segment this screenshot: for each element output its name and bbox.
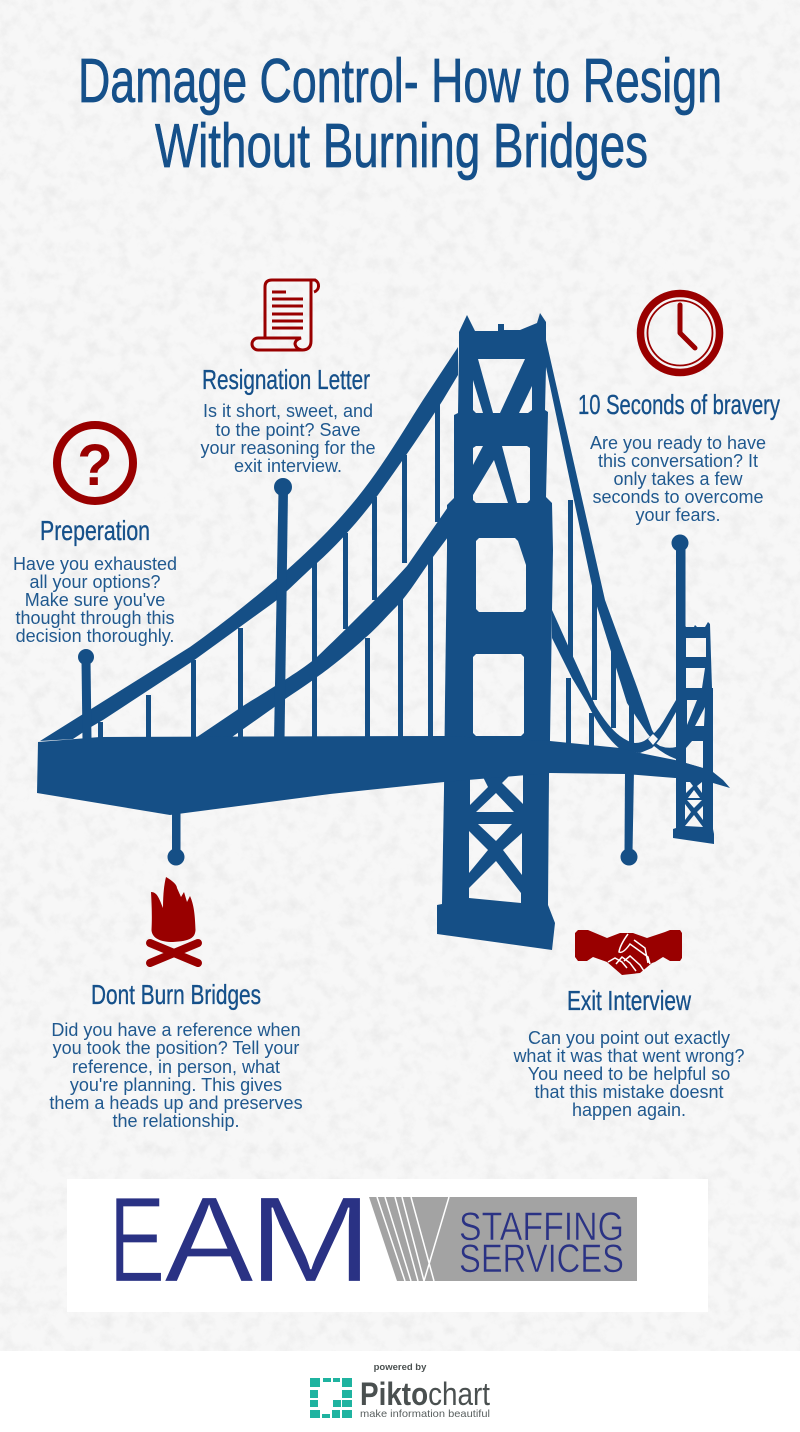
icon: question mark	[57, 425, 133, 501]
piktochart wordmark: Piktochart	[360, 1376, 490, 1412]
tagline: make information beautiful	[360, 1408, 490, 1420]
text block: the relationship.	[112, 1111, 240, 1131]
text block: You need to be helpful so	[528, 1064, 730, 1084]
bridge illustration	[37, 313, 730, 950]
text block: Can you point out exactly	[528, 1028, 730, 1048]
text block	[590, 433, 766, 525]
text block: to the point? Save	[215, 420, 361, 440]
main tower	[437, 313, 555, 950]
right hangers	[566, 500, 634, 747]
text block: what it was that went wrong?	[512, 1046, 745, 1066]
logo grey block	[369, 1197, 637, 1281]
right lower cable	[552, 610, 676, 753]
pole: resignation letter	[274, 478, 292, 740]
heading: Resignation Letter	[202, 364, 370, 395]
left hangers	[98, 400, 440, 740]
text block: thought through this	[15, 608, 175, 628]
icon: campfire	[150, 877, 198, 963]
pole: exit interview	[620, 770, 638, 866]
text block: this conversation? It	[598, 451, 758, 471]
logo wordmark: M	[248, 1172, 373, 1308]
left lower cable	[197, 507, 448, 737]
right cable tail	[654, 742, 676, 759]
logo tagline: STAFFING	[459, 1205, 624, 1249]
text block: only takes a few	[613, 469, 744, 489]
logo tagline: SERVICES	[459, 1237, 624, 1281]
icon: piktochart logo	[310, 1378, 352, 1418]
text block: reference, in person, what	[72, 1057, 280, 1077]
text block	[49, 1020, 303, 1131]
text block: you took the position? Tell your	[53, 1038, 299, 1058]
pole: dont burn bridges	[168, 810, 184, 866]
icon: scroll	[252, 280, 319, 350]
heading: Preperation	[40, 515, 150, 546]
title	[78, 47, 722, 181]
text block	[512, 1028, 745, 1120]
text block: you're planning. This gives	[70, 1075, 282, 1095]
section: dont burn bridges	[49, 979, 303, 1131]
panel: EAM Staffing Services logo	[67, 1172, 708, 1312]
text block: your fears.	[635, 505, 721, 525]
right main cable	[546, 340, 657, 738]
section: preperation	[13, 515, 177, 646]
footer: powered by Piktochart	[0, 1351, 800, 1432]
pole: preperation	[78, 649, 94, 740]
icon: clock	[640, 294, 720, 372]
powered by: powered by	[374, 1362, 427, 1373]
icon: handshake	[575, 930, 682, 975]
logo tagline	[459, 1205, 624, 1281]
heading: Exit Interview	[567, 985, 692, 1016]
text block: that this mistake doesnt	[534, 1082, 724, 1102]
cable crossing gap	[648, 734, 658, 745]
heading: Dont Burn Bridges	[91, 979, 261, 1010]
road deck	[37, 736, 730, 815]
section: resignation letter	[200, 364, 376, 476]
text block: decision thoroughly.	[16, 626, 174, 646]
distant tower	[673, 622, 714, 844]
logo wordmark: A	[164, 1172, 255, 1308]
text block: Did you have a reference when	[51, 1020, 301, 1040]
logo wordmark: E	[109, 1172, 165, 1308]
left main cable	[40, 347, 458, 741]
text block	[13, 554, 177, 646]
section: exit interview	[512, 985, 745, 1120]
text block: Have you exhausted	[13, 554, 177, 574]
section: 10 seconds of bravery	[578, 389, 780, 525]
text block: Are you ready to have	[590, 433, 766, 453]
text block: happen again.	[572, 1100, 686, 1120]
text block: exit interview.	[234, 456, 342, 476]
text block: all your options?	[29, 572, 161, 592]
text block: Is it short, sweet, and	[203, 401, 373, 421]
text block: your reasoning for the	[200, 438, 376, 458]
text block: Make sure you've	[25, 590, 165, 610]
text block	[200, 401, 376, 476]
pole: 10 seconds of bravery	[672, 534, 688, 738]
text block: them a heads up and preserves	[49, 1093, 303, 1113]
text block: seconds to overcome	[592, 487, 764, 507]
icon: question mark: ?	[77, 433, 113, 498]
